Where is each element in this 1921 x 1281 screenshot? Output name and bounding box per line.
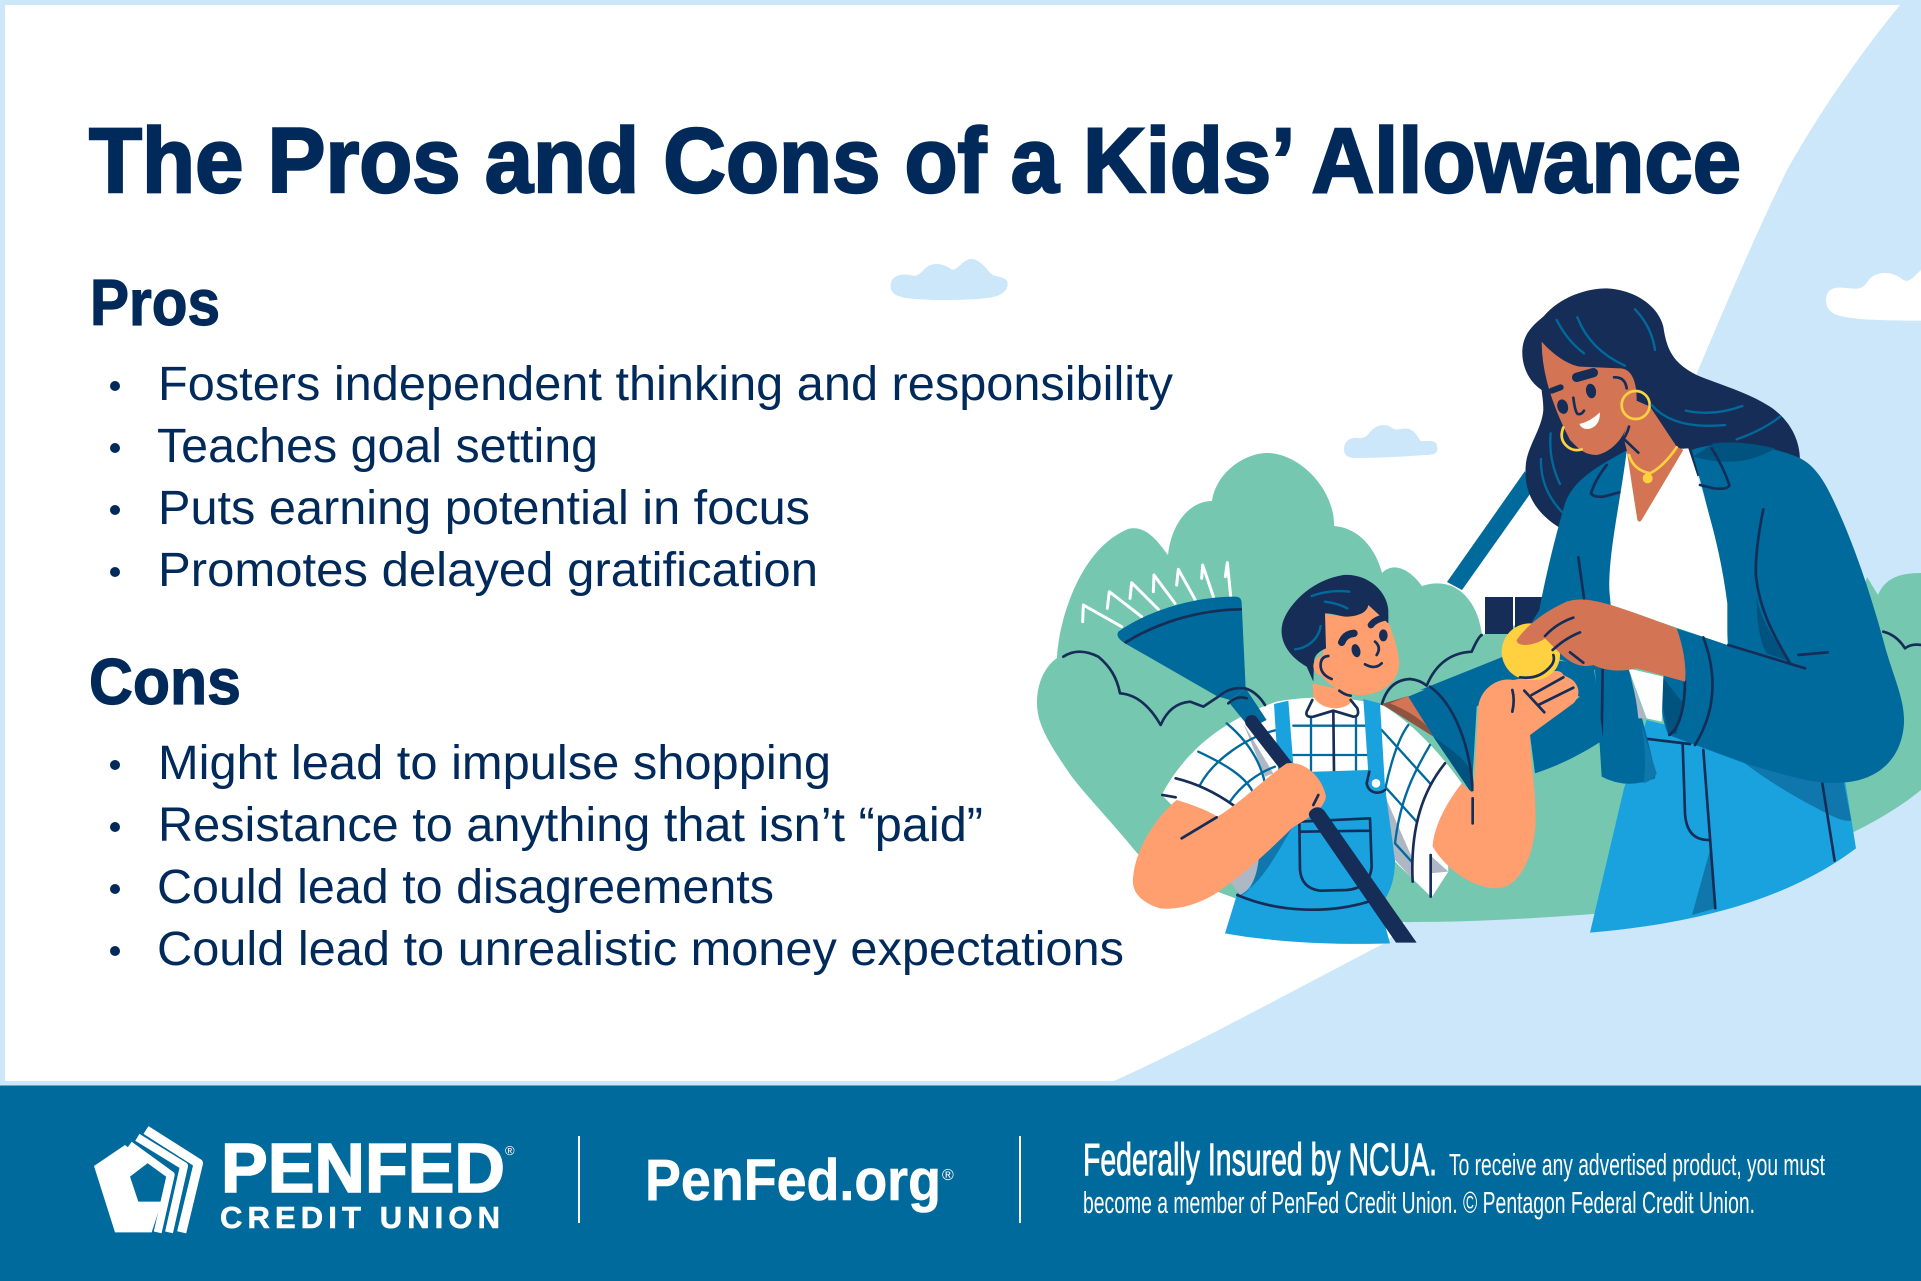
footer divider two <box>1019 1136 1021 1223</box>
cons list: Resistance to anything that isn’t “paid” <box>158 799 983 852</box>
sleeve shadow and arm behind boy <box>1382 657 1513 793</box>
light blue swoosh <box>1114 5 1921 1086</box>
penfed pentagon logo <box>94 1130 198 1232</box>
credit union wordmark: CREDIT UNION <box>220 1200 500 1235</box>
cons section <box>89 645 1124 976</box>
pros list: Teaches goal setting <box>157 420 598 473</box>
footer band <box>0 1086 1921 1281</box>
federally insured statement: Federally Insured by NCUA. <box>1083 1134 1437 1185</box>
boy right arm and hand <box>1433 671 1578 888</box>
woman <box>1420 288 1904 933</box>
pros list: Promotes delayed gratification <box>158 544 818 597</box>
coin <box>1502 623 1560 680</box>
shirt <box>1162 698 1462 897</box>
footer divider one <box>578 1136 580 1223</box>
cons list <box>110 737 1124 976</box>
pros list <box>110 358 1173 597</box>
pros heading: Pros <box>90 266 220 339</box>
boy left arm <box>1133 763 1326 909</box>
cons list: Could lead to unrealistic money expectations <box>157 923 1124 976</box>
title: The Pros and Cons of a Kids’ Allowance <box>89 110 1741 212</box>
overalls <box>1225 699 1395 944</box>
cloud: white right <box>1826 270 1921 321</box>
rake handle upper <box>1252 722 1287 767</box>
website registered mark: ® <box>942 1167 954 1184</box>
forearm sleeve <box>1420 657 1603 773</box>
woman hair <box>1522 288 1800 530</box>
green bushes <box>1037 453 1921 923</box>
illustration: parent giving a coin to child <box>1037 288 1921 944</box>
house roof line <box>1447 471 1530 590</box>
boy head <box>1282 575 1399 696</box>
cons list: Might lead to impulse shopping <box>158 737 831 790</box>
rake handle lower <box>1309 807 1417 943</box>
earrings and necklace <box>1562 391 1677 483</box>
cloud: top centre <box>891 259 1008 300</box>
cloud: small centre <box>1344 425 1437 458</box>
pros list: Fosters independent thinking and responsibility <box>158 358 1173 411</box>
registered mark: ® <box>505 1143 515 1158</box>
boy neck, collar <box>1306 683 1358 717</box>
rake head <box>1083 563 1246 700</box>
jacket lines <box>1578 448 1828 745</box>
website: PenFed.org <box>645 1148 941 1213</box>
rake neck <box>1219 688 1267 728</box>
cons heading: Cons <box>89 645 241 718</box>
bush outlines <box>1063 632 1921 725</box>
penfed wordmark: PENFED <box>221 1129 505 1207</box>
house windows <box>1485 597 1542 634</box>
hair highlights <box>1541 309 1780 513</box>
cons list: Could lead to disagreements <box>157 861 774 914</box>
pros section <box>90 266 1173 597</box>
woman trousers <box>1590 720 1856 933</box>
woman neck and face <box>1542 342 1683 522</box>
woman jacket <box>1517 442 1904 784</box>
pros list: Puts earning potential in focus <box>158 482 810 535</box>
boy <box>1133 575 1578 944</box>
woman hand <box>1517 599 1685 682</box>
woman blouse <box>1609 448 1727 722</box>
